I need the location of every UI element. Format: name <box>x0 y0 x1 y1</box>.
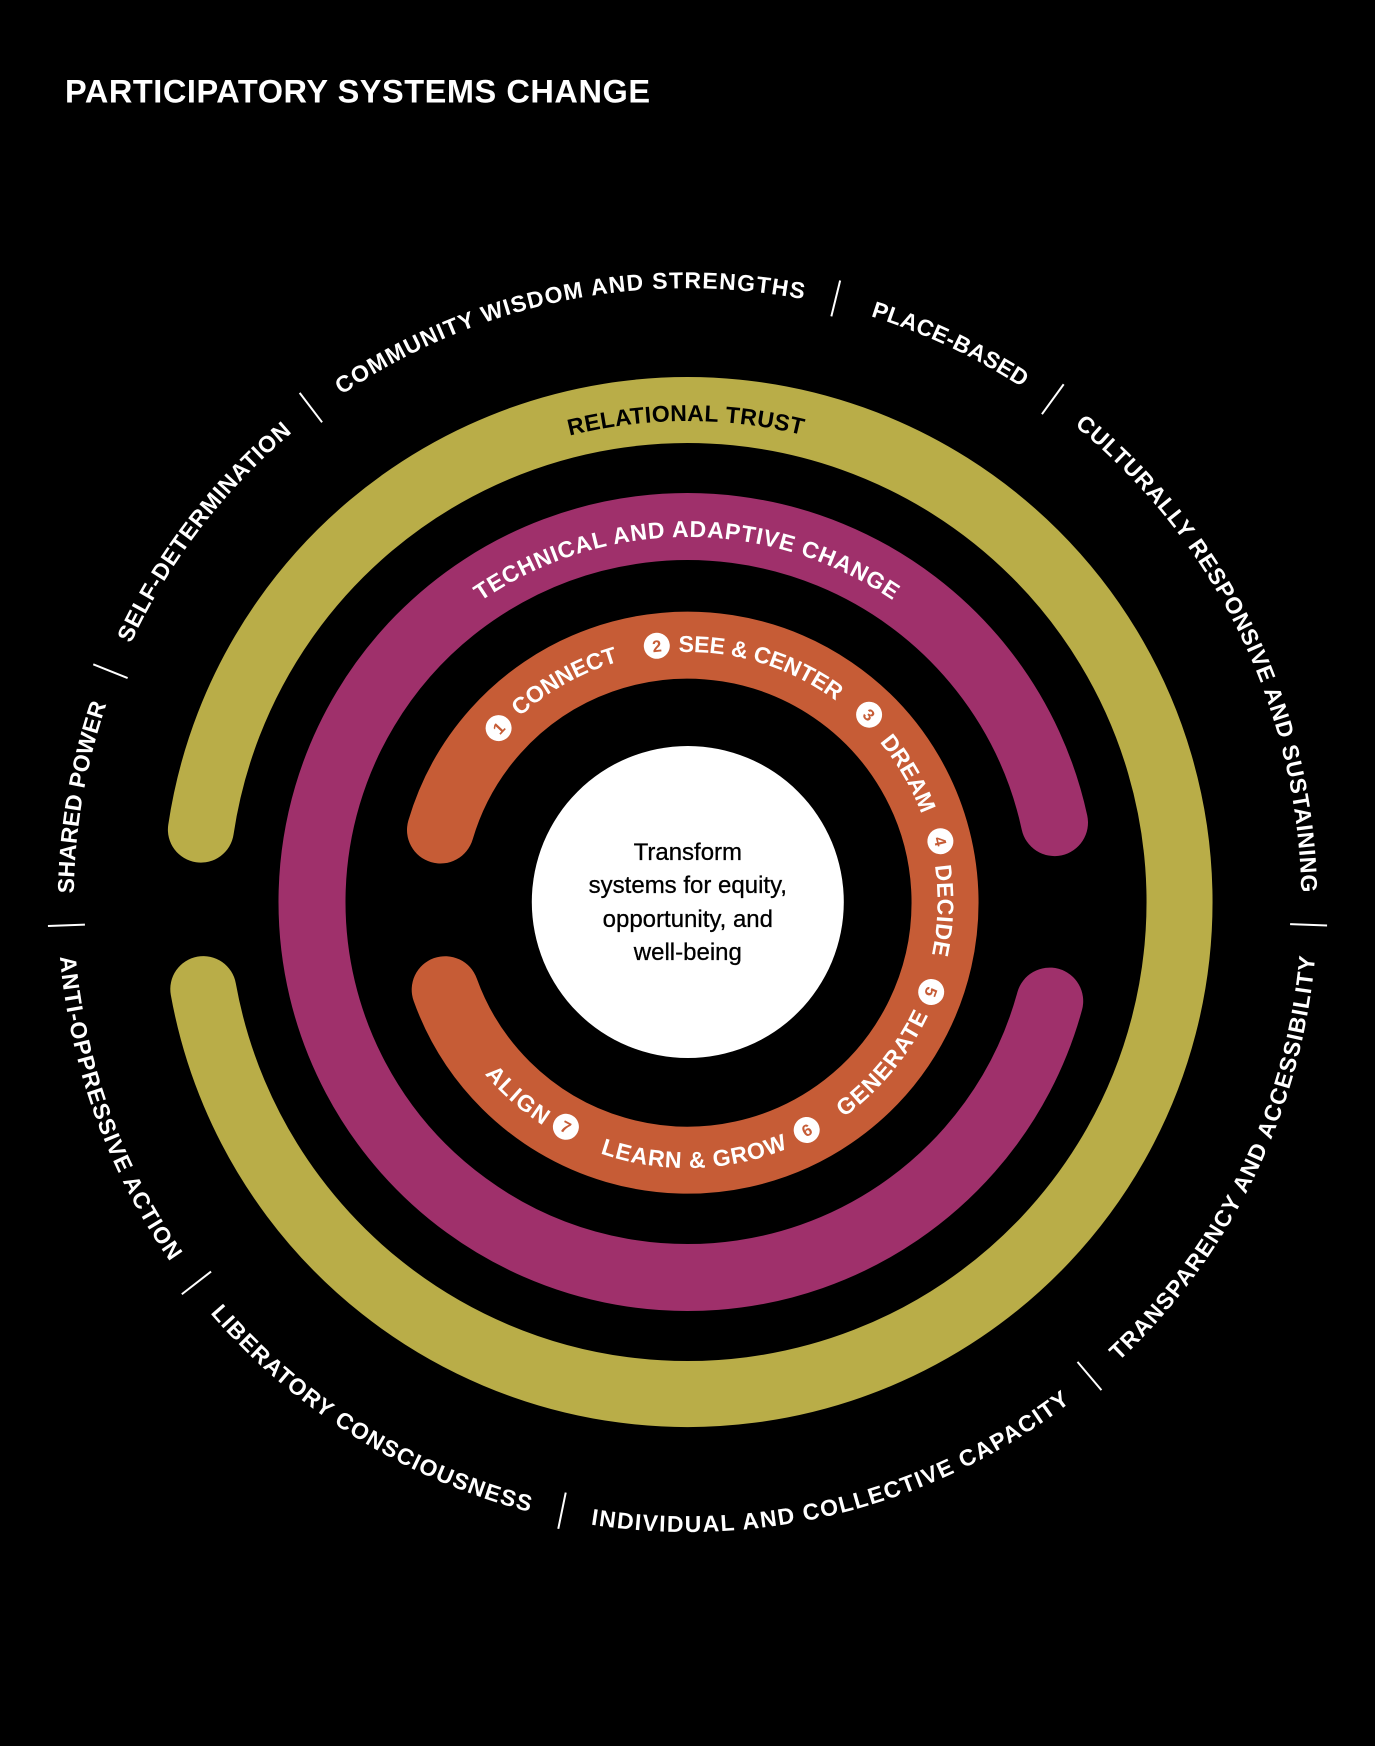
label: technical and adaptive change: TECHNICAL AND ADAPTIVE CHANGE <box>472 521 900 600</box>
step badge 2 <box>642 631 671 660</box>
step label: dream: DREAM <box>880 733 936 813</box>
outer label: place-based: PLACE-BASED <box>872 302 1028 384</box>
label: relational trust: RELATIONAL TRUST <box>567 405 806 436</box>
center text <box>589 839 787 966</box>
step badge 1 <box>480 710 517 746</box>
outer label: self-determination: SELF-DETERMINATION <box>118 421 291 642</box>
outer label: culturally responsive and sustaining: CULTURALLY RESPONSIVE AND SUSTAINING <box>1078 416 1318 891</box>
step label: generate: GENERATE <box>838 1009 928 1114</box>
center text: systems for equity, <box>589 872 787 899</box>
step label: align: ALIGN <box>485 1068 551 1125</box>
outer label: shared power: SHARED POWER <box>58 702 106 893</box>
center circle <box>532 746 844 1058</box>
title: PARTICIPATORY SYSTEMS CHANGE <box>65 74 650 110</box>
center text: opportunity, and <box>603 906 773 933</box>
outer label: transparency and accessibility: TRANSPARENCY AND ACCESSIBILITY <box>1108 956 1315 1358</box>
step badge 6 <box>789 1112 824 1148</box>
step badge 4: 4 <box>930 835 949 849</box>
ring: relational trust <box>201 410 1180 1394</box>
step badge 7 <box>548 1109 583 1144</box>
outer label: individual and collective capacity: INDIVIDUAL AND COLLECTIVE CAPACITY <box>592 1390 1066 1532</box>
center text: Transform <box>634 839 742 866</box>
ring: process steps <box>440 645 945 1160</box>
step label: connect: CONNECT <box>512 646 614 714</box>
step badge 1: 1 <box>490 719 509 738</box>
diagram: concentric rings <box>48 272 1328 1532</box>
step badge 4 <box>925 825 956 857</box>
step badge 6: 6 <box>799 1121 815 1141</box>
step badge 5 <box>915 975 948 1009</box>
step badge 7: 7 <box>557 1118 574 1138</box>
outer label: anti-oppressive action: ANTI-OPPRESSIVE ACTION <box>60 957 182 1260</box>
step badge 3 <box>851 696 887 733</box>
outer label: liberatory consciousness: LIBERATORY CONSCIOUSNESS <box>211 1304 532 1511</box>
step badge 3: 3 <box>859 706 878 725</box>
step badge 2: 2 <box>651 637 663 656</box>
step label: learn and grow: LEARN & GROW <box>602 1134 784 1168</box>
outer label: community wisdom and strengths: COMMUNITY WISDOM AND STRENGTHS <box>336 272 804 392</box>
step label: decide: DECIDE <box>932 865 954 956</box>
step badge 5: 5 <box>920 984 940 999</box>
ring: technical and adaptive change <box>312 527 1055 1278</box>
step label: see and center: SEE & CENTER <box>679 636 842 700</box>
center text: well-being <box>633 939 742 966</box>
